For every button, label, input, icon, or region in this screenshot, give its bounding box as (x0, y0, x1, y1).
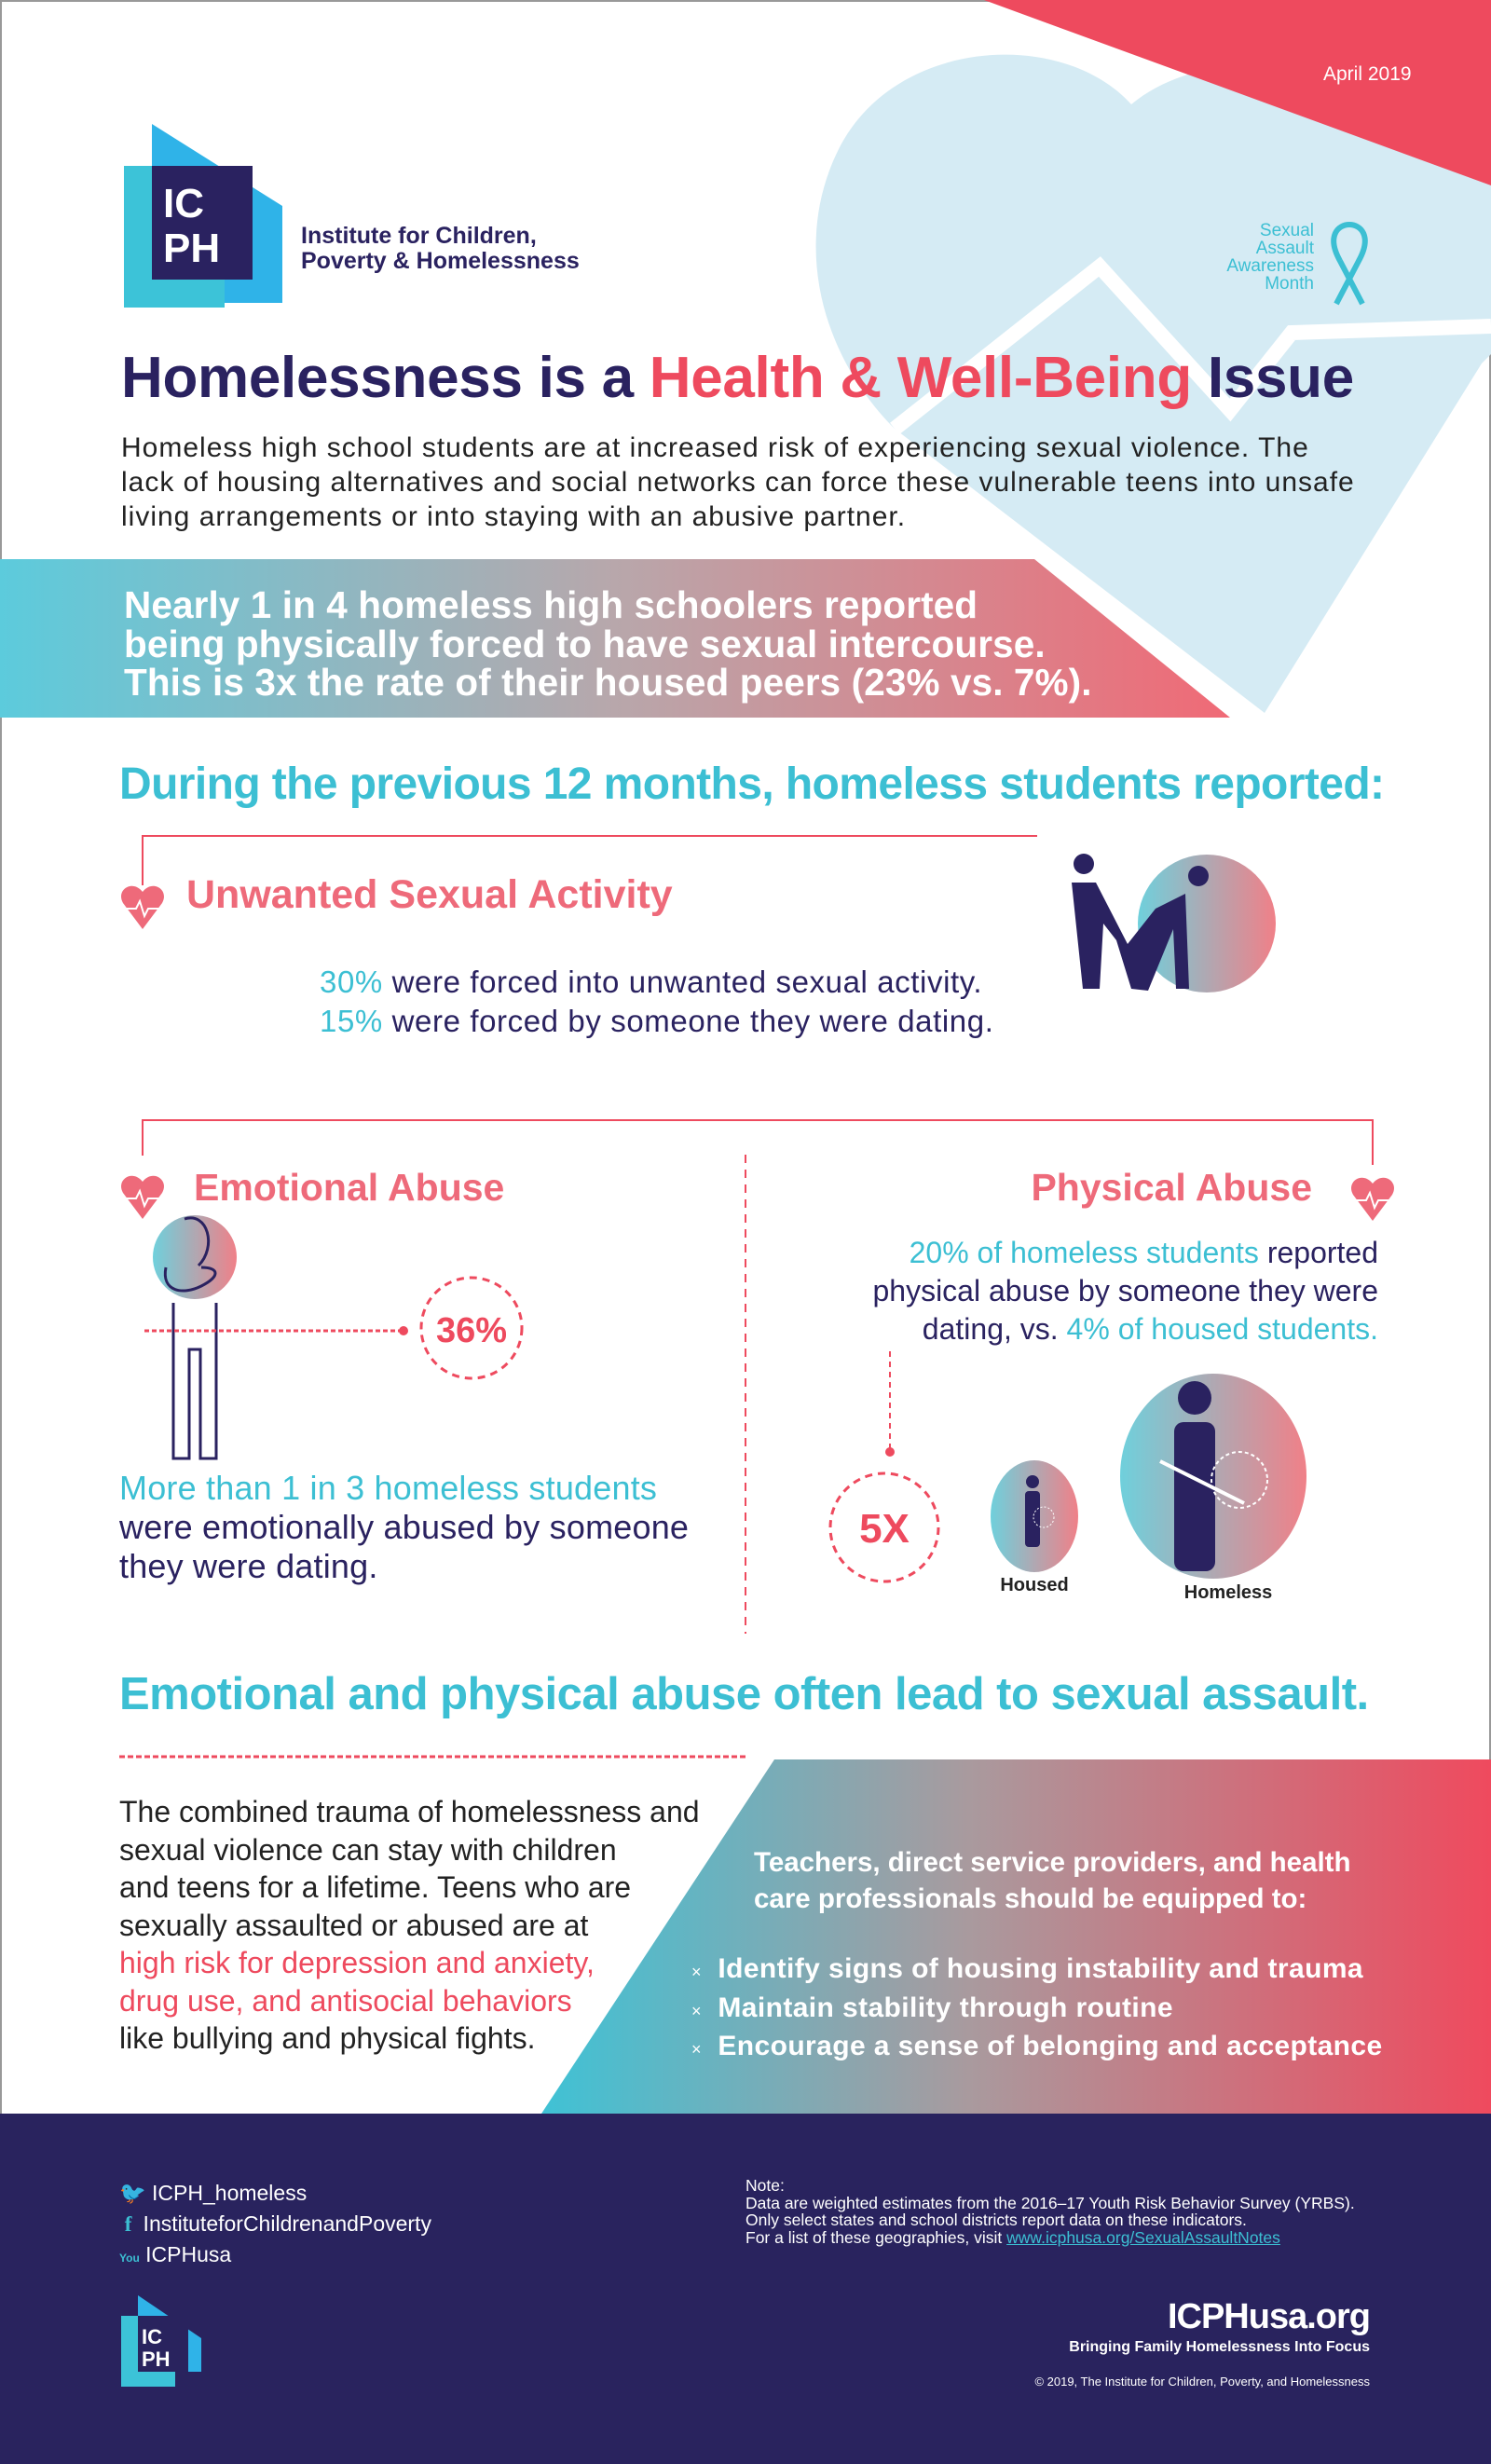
callout: recommendations: Teachers, direct service providers, and health (754, 1847, 1351, 1878)
footer: social links: You ICPHusa (119, 2242, 231, 2266)
text: dating, vs. 4% of housed students. (923, 1312, 1378, 1346)
section heading: During the previous 12 months, homeless students reported: (119, 760, 1384, 809)
footer: website: © 2019, The Institute for Children, Poverty, and Homelessness (1034, 2375, 1370, 2389)
stats (320, 965, 993, 1038)
icon: person hugging self with 36% (144, 1215, 524, 1459)
awareness ribbon: Sexual (1260, 221, 1314, 240)
comparison chart: 5X (859, 1506, 910, 1552)
footer: note: For a list of these geographies, visit www.icphusa.org/SexualAssaultNotes (746, 2227, 1280, 2246)
text block: trauma (119, 1795, 700, 2055)
comparison chart (829, 1351, 1306, 1603)
icon: two figures (1072, 854, 1276, 992)
date: April 2019 (1323, 63, 1412, 85)
stats: 15% were forced by someone they were dating. (320, 1004, 993, 1038)
text (119, 1469, 689, 1585)
icon: person hugging self with 36%: 36% (436, 1311, 507, 1350)
footer: logo: IC (142, 2325, 162, 2348)
panel: physical abuse (829, 1166, 1394, 1603)
text block: trauma: drug use, and antisocial behaviors (119, 1983, 572, 2017)
text (872, 1236, 1378, 1346)
panel: unwanted sexual activity (121, 872, 993, 1038)
footer: note: Data are weighted estimates from the 2016–17 Youth Risk Behavior Survey (YRBS). (746, 2194, 1355, 2212)
footer: social links (119, 2181, 431, 2266)
footer: social links: f InstituteforChildrenandPoverty (125, 2211, 431, 2236)
callout: recommendations (691, 1847, 1383, 2061)
banner stat: This is 3x the rate of their housed peers (23% vs. 7%). (124, 661, 1092, 704)
banner stat: being physically forced to have sexual intercourse. (124, 623, 1046, 665)
footer: logo (121, 2295, 201, 2387)
connector lines (142, 835, 1374, 1634)
comparison chart: Housed (1000, 1575, 1069, 1595)
intro paragraph: Homeless high school students are at increased risk of experiencing sexual violence. The (121, 432, 1309, 463)
awareness ribbon (1226, 221, 1368, 306)
footer: note: Only select states and school districts report data on these indicators. (746, 2211, 1247, 2229)
text: were emotionally abused by someone (119, 1508, 689, 1546)
footer: website (1034, 2297, 1370, 2389)
logo: PH (163, 226, 220, 271)
text block: trauma: The combined trauma of homelessness and (119, 1795, 700, 1828)
intro paragraph: lack of housing alternatives and social networks can force these vulnerable teens into unsafe (121, 467, 1355, 498)
heading: Unwanted Sexual Activity (186, 872, 673, 917)
text block: trauma: high risk for depression and anxiety, (119, 1946, 595, 1979)
footer: note: Note: (746, 2176, 785, 2195)
callout: recommendations: × Identify signs of housing instability and trauma (691, 1953, 1363, 1984)
icon: heart (1351, 1178, 1394, 1221)
callout: recommendations: × Encourage a sense of belonging and acceptance (691, 2031, 1383, 2061)
logo: IC (163, 181, 204, 226)
text block: trauma: and teens for a lifetime. Teens who are (119, 1870, 631, 1904)
logo: Institute for Children, (301, 223, 537, 249)
logo (124, 124, 580, 308)
intro paragraph: living arrangements or into staying with an abusive partner. (121, 501, 906, 532)
footer: note (746, 2176, 1355, 2246)
footer: social links: 🐦 ICPH_homeless (119, 2181, 307, 2205)
awareness ribbon: Month (1265, 274, 1314, 294)
callout: recommendations: × Maintain stability through routine (691, 1992, 1173, 2022)
text: 20% of homeless students reported (910, 1236, 1378, 1269)
awareness ribbon: Assault (1256, 239, 1314, 258)
icon: heart (121, 885, 164, 929)
footer: website: Bringing Family Homelessness Into Focus (1069, 2339, 1370, 2355)
callout: recommendations: care professionals should be equipped to: (754, 1883, 1306, 1914)
intro paragraph (121, 432, 1355, 532)
footer: website: ICPHusa.org (1168, 2297, 1370, 2336)
stats: 30% were forced into unwanted sexual activity. (320, 965, 982, 999)
text block: trauma: sexually assaulted or abused are at (119, 1909, 588, 1942)
banner stat (124, 583, 1092, 704)
footer: logo: PH (142, 2348, 171, 2371)
title: Homelessness is a Health & Well-Being Issue (121, 346, 1354, 410)
text: they were dating. (119, 1547, 378, 1585)
text: physical abuse by someone they were (872, 1274, 1378, 1307)
panel: emotional abuse (119, 1166, 689, 1585)
text block: trauma: sexual violence can stay with children (119, 1832, 617, 1866)
comparison chart: Homeless (1184, 1582, 1272, 1603)
logo: Poverty & Homelessness (301, 248, 580, 274)
section heading: abuse leads to assault: Emotional and physical abuse often lead to sexual assault. (119, 1669, 1369, 1719)
heading: Physical Abuse (1031, 1166, 1312, 1209)
icon: heart (121, 1176, 164, 1219)
text block: trauma: like bullying and physical fights. (119, 2021, 535, 2055)
banner stat: Nearly 1 in 4 homeless high schoolers reported (124, 583, 978, 626)
heading: Emotional Abuse (194, 1166, 504, 1209)
awareness ribbon: Awareness (1226, 256, 1314, 276)
text: More than 1 in 3 homeless students (119, 1469, 657, 1507)
